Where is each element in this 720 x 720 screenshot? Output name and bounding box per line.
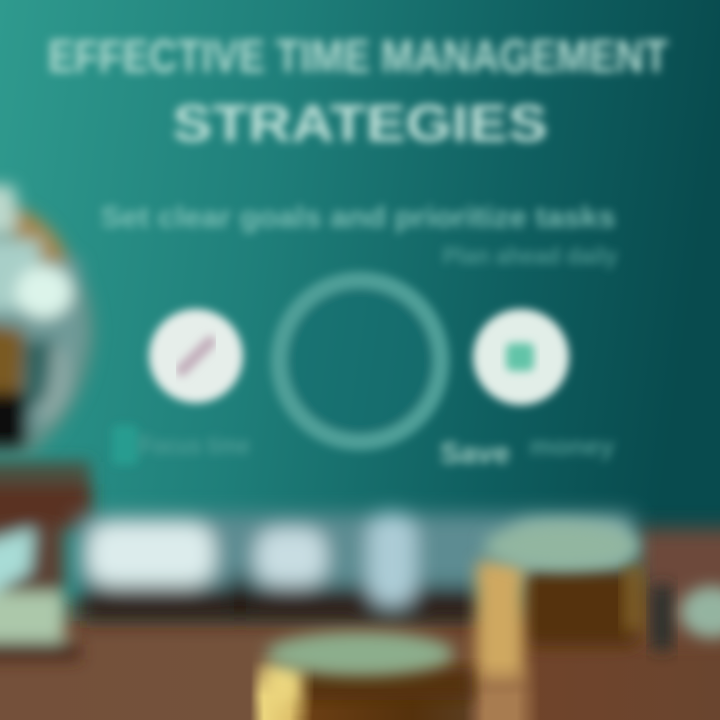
right caption — [440, 431, 615, 470]
row of blurred cards — [75, 512, 635, 621]
right caption: money — [530, 431, 615, 461]
icon: left badge — [149, 309, 243, 403]
icon: right badge — [473, 309, 569, 405]
coin stack: front — [250, 632, 482, 720]
title: STRATEGIES — [172, 95, 548, 153]
central ring — [279, 280, 441, 442]
side caption: Plan ahead daily — [442, 243, 618, 270]
stack of books — [0, 462, 92, 660]
left caption — [112, 425, 250, 465]
right caption: Save — [440, 437, 510, 470]
coin: right edge — [652, 585, 720, 650]
coin stack: back — [462, 522, 644, 720]
subtitle: Set clear goals and prioritize tasks — [100, 201, 616, 234]
left caption: Focus time — [140, 430, 250, 460]
icon: globe — [0, 185, 94, 455]
wooden table — [0, 528, 720, 720]
title — [48, 30, 668, 153]
